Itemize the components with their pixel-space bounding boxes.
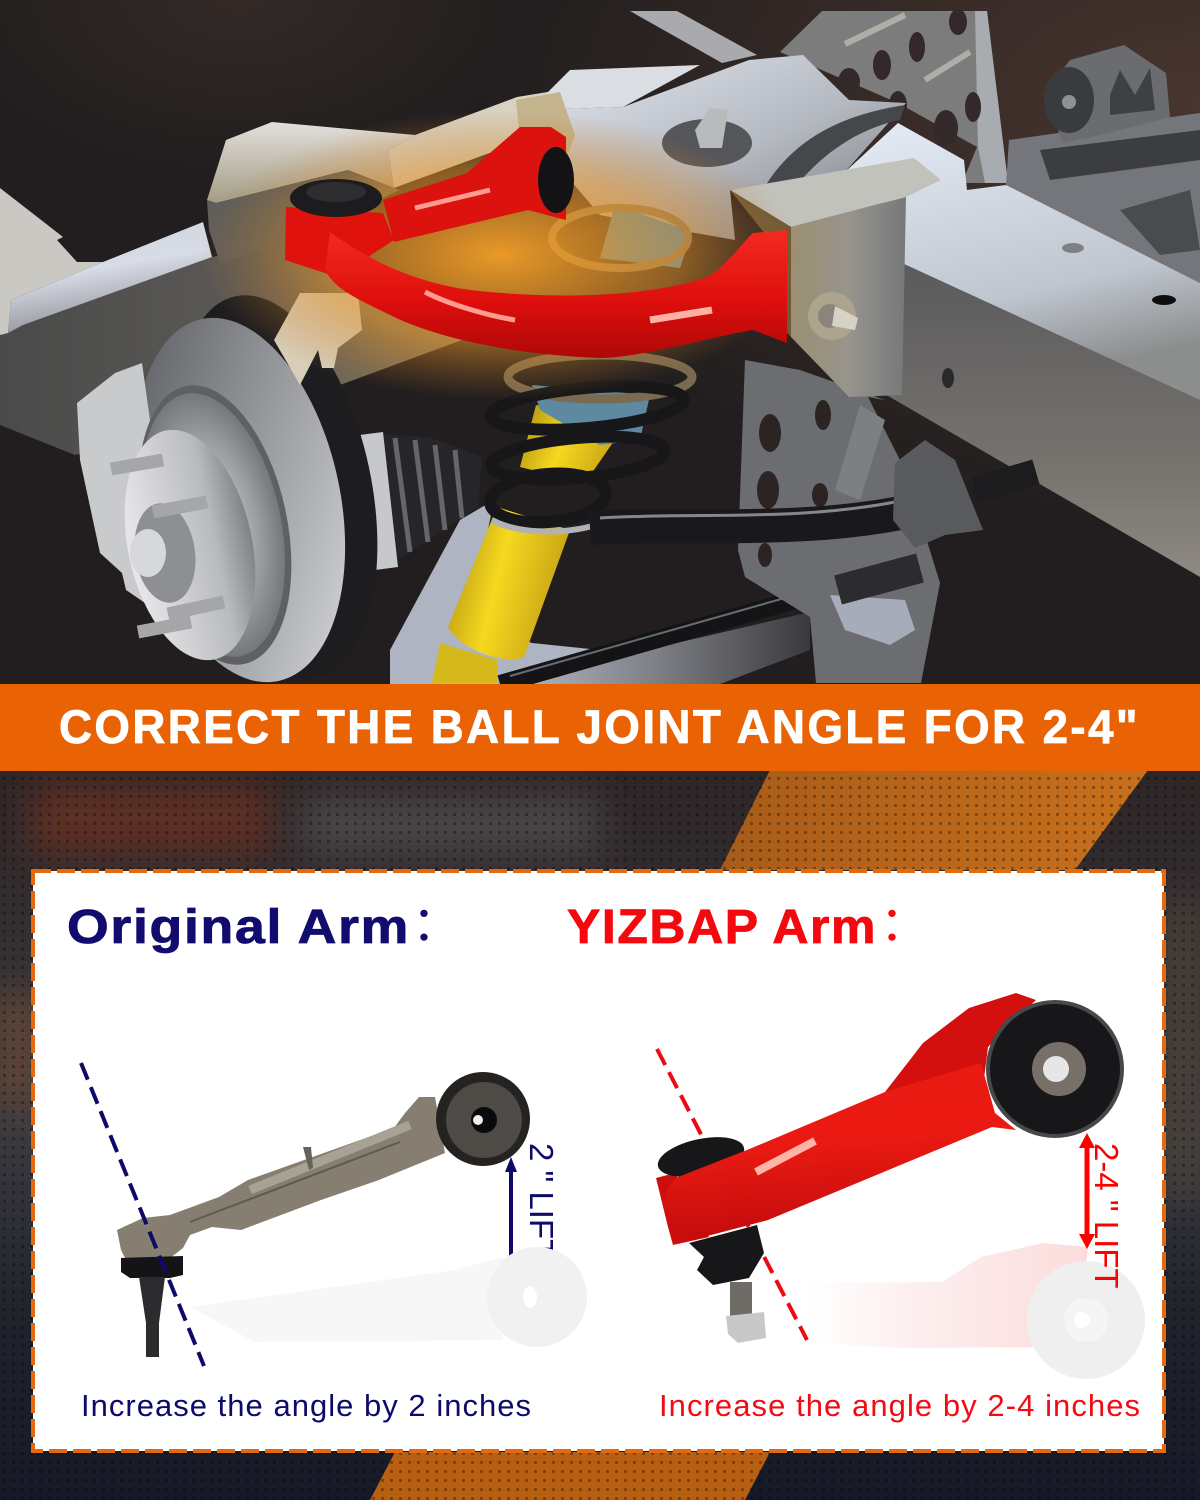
red upper control arm — [285, 127, 787, 358]
lift arrow and label — [505, 1143, 560, 1259]
yizbap arm figure — [654, 993, 1145, 1423]
CV axle boot — [344, 432, 482, 570]
orange band bottom — [370, 1452, 770, 1500]
caption: Increase the angle by 2 inches — [81, 1388, 531, 1423]
rail bracket — [791, 197, 906, 397]
dashed angle line — [81, 1063, 204, 1366]
banner heading: CORRECT THE BALL JOINT ANGLE FOR 2-4" — [59, 700, 1140, 753]
ball joint below head — [274, 293, 362, 385]
banner — [0, 684, 1200, 771]
panel: lower background — [0, 770, 1200, 1500]
coil spring — [488, 208, 692, 532]
lift arrow and label: 2 " LIFT — [523, 1143, 560, 1259]
heading: yizbap arm: ： — [868, 887, 916, 957]
orange glow behind arm — [200, 110, 800, 400]
heading: yizbap arm: YIZBAP Arm — [567, 901, 877, 954]
left chassis rail — [0, 90, 560, 455]
upper perforated plate — [780, 9, 1008, 183]
dashed angle line — [657, 1049, 807, 1340]
heading: original arm: Original Arm — [67, 901, 410, 954]
main chassis rail — [730, 123, 1200, 577]
sway bar — [590, 440, 1036, 590]
panel: comparison card — [33, 871, 1164, 1451]
original arm figure — [81, 1063, 587, 1423]
brake disc and hub — [77, 277, 409, 702]
caption: Increase the angle by 2-4 inches — [659, 1388, 1140, 1423]
lower perforated bracket — [738, 360, 940, 683]
heading: original arm: ： — [400, 887, 448, 957]
differential and mount at right — [1006, 45, 1200, 283]
ghost of original arm — [190, 1247, 587, 1347]
worn arm body — [117, 1072, 530, 1357]
ghost of raised arm — [806, 1243, 1145, 1379]
lift arrow and label: 2-4 " LIFT — [1088, 1143, 1125, 1289]
lower control arm and link — [390, 500, 830, 684]
upper bar behind tower — [630, 11, 757, 63]
red arm — [654, 993, 1124, 1343]
shock absorber — [432, 205, 692, 683]
orange band top — [720, 770, 1148, 870]
shock tower — [516, 55, 906, 240]
panel: suspension hero image — [0, 0, 1200, 702]
